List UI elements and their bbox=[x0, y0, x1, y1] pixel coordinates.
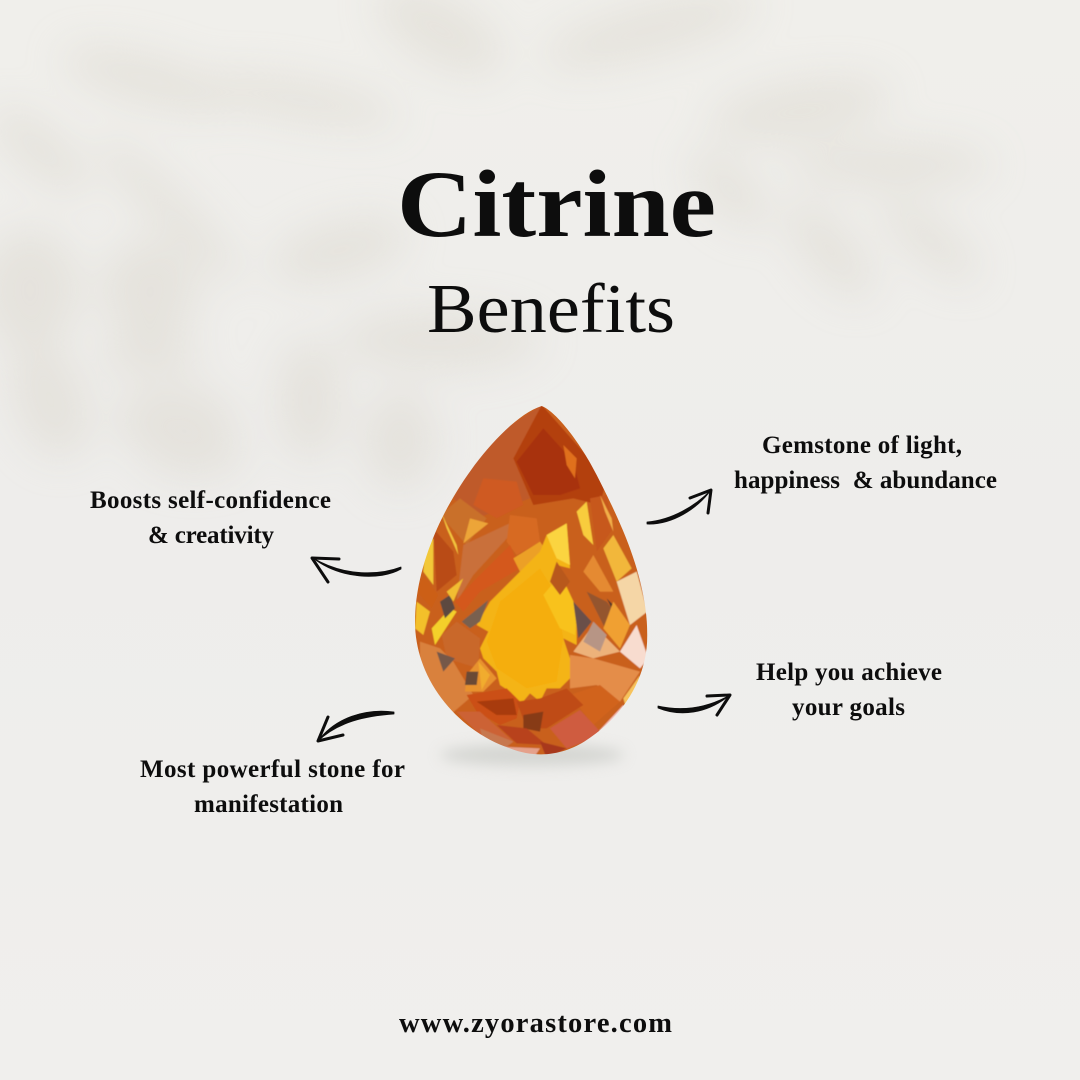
label: boosts self-confidence: Boosts self-confidence bbox=[90, 487, 331, 514]
arrow: to achieve goals bbox=[658, 695, 730, 715]
label: help you achieve goals: Help you achieve bbox=[756, 659, 942, 686]
label: boosts self-confidence bbox=[90, 487, 331, 549]
label: gemstone of light: Gemstone of light, bbox=[762, 432, 962, 459]
heading: Citrine: Citrine bbox=[397, 151, 716, 257]
icon: citrine gemstone bbox=[415, 406, 648, 754]
arrow: to self-confidence bbox=[312, 558, 401, 582]
label: gemstone of light: happiness & abundance bbox=[734, 467, 997, 494]
right facets bbox=[577, 502, 593, 545]
label: most powerful stone: manifestation bbox=[194, 791, 343, 818]
label: help you achieve goals: your goals bbox=[792, 694, 905, 721]
label: most powerful stone: Most powerful stone for bbox=[140, 756, 405, 783]
blurred leaf shadows bbox=[0, 0, 990, 490]
arrow: to gemstone of light bbox=[647, 490, 711, 524]
gem shadow bbox=[440, 744, 624, 766]
label: most powerful stone bbox=[140, 756, 405, 818]
arrow: to manifestation bbox=[318, 711, 394, 741]
label: help you achieve goals bbox=[756, 659, 942, 721]
label: boosts self-confidence: & creativity bbox=[148, 522, 274, 549]
left facets bbox=[432, 608, 457, 645]
heading: Benefits: Benefits bbox=[427, 271, 675, 348]
lower facets bbox=[467, 688, 520, 725]
label: gemstone of light bbox=[734, 432, 997, 494]
website url: www.zyorastore.com bbox=[399, 1008, 672, 1039]
title bbox=[397, 151, 716, 348]
center yellow facet bbox=[477, 523, 577, 703]
